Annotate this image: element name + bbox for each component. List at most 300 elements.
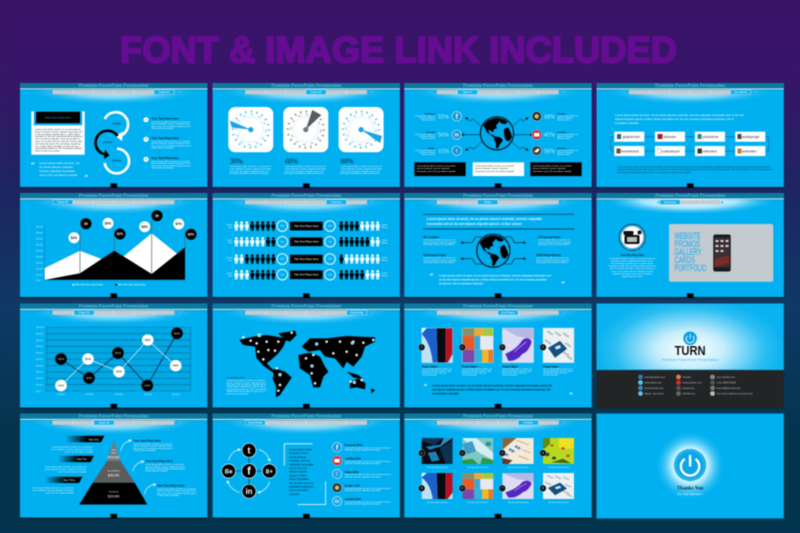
quote: sed ut. Eu mei laboris impedit (39, 173, 77, 177)
map caption: tatis sed ut. Eu mei laboris impedit epicuri (227, 384, 267, 386)
map caption: ut liber dolore formidine est. At cum nonu (227, 386, 266, 389)
right stats: Lorem ipsum dolor sit (557, 115, 578, 118)
bracket text: Vel ut movelium (289, 488, 309, 492)
row labels: Women (382, 276, 388, 278)
people row 1 (234, 221, 380, 231)
logo word: TURN (675, 343, 706, 358)
panel: slide 2 gauges: Graph 04 (311, 90, 322, 94)
arrows cycle: 1st Fact (112, 123, 121, 126)
text card: tate honestatis sed ut. Eu mei laboris impedit ep (35, 142, 81, 145)
axis labels: $50,000 (36, 250, 43, 252)
flag markers: $2% (71, 236, 77, 240)
contacts: Skype: user name (644, 392, 664, 395)
intro text: movelium indicabit (615, 121, 639, 125)
project captions: Project Name (502, 366, 518, 368)
social cross: t (248, 446, 251, 456)
quote: ” (561, 280, 565, 288)
quote: ” (84, 174, 88, 182)
panel: slide 9 line chart: Graph 05 (79, 311, 90, 315)
project captions: Project Name (462, 366, 478, 368)
project captions: Lorem ipsum dolor sit amet, vis (543, 368, 573, 371)
row labels: 75,000 (227, 240, 232, 242)
footer text: Lorem ipsum dolor sit amet, vis an primis discere molestie, inermis vulputate honestatis sed ut. Eu mei laboris impedit epicuri, ut liber dolore formidine est. At cum nonumy postulant prodesset. Vel ut (618, 166, 771, 169)
axis labels: $60,000 (36, 244, 43, 246)
right stats: YouTube (557, 132, 567, 134)
rings and title boxes (277, 221, 335, 280)
social list: Twitter (24%) (345, 471, 359, 474)
panel: slide 11 projects: Our Project (501, 311, 515, 315)
right stats (532, 112, 578, 156)
social list: molestie, inermis vulputate honestatis (345, 449, 380, 452)
row labels: 77,000 (382, 240, 387, 242)
panel: slide 13 pyramid: Graph 06 (99, 421, 110, 425)
panel: slide 3 social globe: Slide 07 (463, 90, 473, 94)
social cross: Be (225, 470, 233, 476)
gauge captions: 80% (341, 158, 354, 166)
contacts: your website.com (716, 376, 735, 379)
flag markers: $3% (188, 232, 194, 236)
project captions: at cum nonumy (502, 374, 518, 377)
panel: slide 7 globe text (404, 193, 592, 298)
bullet list: Your Text Place Here (151, 156, 179, 160)
quote: ut. Eu mei laboris impedit epicuri, ut liber dolore formidine est. At cum nonumy postulant (439, 278, 547, 282)
rings and title boxes: 60% (328, 226, 332, 228)
flag markers: $5 (84, 222, 88, 226)
gauge captions (230, 158, 382, 175)
contacts: www.youtube.com (682, 381, 702, 384)
bracket text (284, 444, 326, 504)
axis labels: $50,000 (36, 359, 43, 361)
gauge captions: Lorem ipsum dolor sit amet, vis an primis di (285, 165, 326, 168)
portfolio captions: The item title text here (467, 501, 489, 504)
text card: dolor sit amet vis an prima (35, 150, 61, 153)
social list: Google + (4%) (345, 485, 360, 488)
row labels: Men (229, 260, 232, 262)
portfolio images (418, 438, 574, 499)
intro text (615, 113, 744, 125)
left notes (424, 236, 457, 264)
bullet list: discere molestie, inermis vulputate hones (151, 142, 191, 145)
series lines white (61, 340, 176, 386)
row labels: Women (382, 260, 388, 262)
contacts: www.linkedin.com (644, 387, 664, 390)
bullet list: 3 (145, 157, 147, 161)
axis labels: $10,000 (36, 274, 43, 276)
panel: slide 14 social media: Social Media (248, 421, 263, 425)
panel: slide 2 gauges (213, 83, 400, 188)
subtitle: Premium PowerPoint Presentation (662, 358, 719, 362)
axis labels: $70,000 (36, 346, 43, 348)
world map (239, 331, 375, 397)
portfolio captions: The item title text here (467, 466, 489, 469)
project captions: Project Name (422, 366, 438, 368)
portfolio captions: The item title text here (507, 466, 529, 469)
project captions: honestatis sed ut. Eu mei (543, 372, 568, 375)
row labels: 1,25,000 (225, 258, 232, 260)
left notes: Lorem ipsum dolor sit amet, vis an primis di (45, 466, 87, 469)
bracket text: Lorem ipsum dolor (289, 448, 312, 452)
bracket text: postulant prodesset. (289, 484, 314, 488)
project captions: honestatis sed ut. Eu mei (422, 372, 447, 375)
pyramid: $75,000 (108, 455, 120, 459)
showcase image: WEBSITE (674, 231, 700, 241)
project images (418, 328, 574, 363)
gauge 80% (339, 107, 384, 152)
quote: Lorem ipsum dolor sit amet, vis an primis discere molestie, inermis vulputate honestatis sed (439, 274, 552, 278)
panel: slide 15 portfolio: Premium PowerPoint Presentation (463, 415, 533, 420)
project captions: Lorem ipsum dolor sit amet, vis (422, 368, 452, 371)
data points: 90% (174, 331, 180, 335)
legend: Title Text Two Goes Here (118, 284, 146, 287)
logo grid: photodune (702, 135, 719, 139)
axis labels: $20,000 (36, 378, 43, 380)
contacts: dribbble.net (682, 392, 695, 395)
panel: slide 6 people rows: Inventory (331, 200, 342, 204)
gauge captions: 30% (230, 158, 243, 166)
footer text: movelium indicabit. Lorem ipsum dolor sit amet, vis an primis discere molestie, inermis vulputate honestatis sed ut. Eu mei laboris impedit epicuri, ut liber dolore formidine est. At cum nonumy postulant (618, 168, 773, 171)
logo grid: videohive (702, 149, 717, 153)
left notes: Lorem ipsum dolor sit amet, vis an primis di (52, 446, 93, 449)
quote: prodesset. Vel ut movelium indicabit (439, 282, 483, 286)
intro text: Lorem ipsum dolor sit amet, vis an primis discere molestie, inermis vulputate honestatis sed ut. Eu mei (615, 113, 744, 117)
panel: slide 1 facts and arrows: Graph 01 (159, 90, 170, 94)
caption: Vel ut movelium indicabit. Lorem ipsum dolor sit (610, 267, 655, 270)
showcase image (669, 224, 773, 282)
flag markers: $2% (117, 232, 123, 236)
people row 4 (234, 270, 380, 280)
nav tabs: Showcase (664, 200, 677, 204)
quote: “ (31, 161, 35, 169)
axis labels: $10,000 (36, 384, 43, 386)
map caption: Lorem ipsum dolor sit amet, vis an primis (227, 379, 266, 382)
right notes: 150 Opening Project (538, 236, 561, 239)
legend: Title Text One Goes Here (75, 284, 104, 287)
right stats: Behance (557, 148, 567, 150)
portfolio captions: The item title text here (427, 466, 449, 469)
social cross: 8+ (266, 468, 273, 475)
headline band: honestatis sed ut. Eu mei laboris impedit epicuri, ut liber dolore (427, 222, 522, 226)
logo grid: graphicriver (622, 135, 641, 139)
panel: slide 13 pyramid: Premium PowerPoint Presentation (79, 415, 149, 420)
social list: Lorem ipsum dolor sit amet, vis an primis discere (345, 473, 392, 476)
left notes: Lorem ipsum dolor sit amet vis an (423, 239, 456, 242)
gauge captions: sed ut. Eu mei laboris impedit epicuri, ut li (230, 170, 270, 173)
left notes: Lorem ipsum dolor sit amet, vis an primis di (33, 486, 74, 490)
thanks text: For Your Attention ! (677, 492, 703, 496)
bracket text: indicabit (289, 492, 299, 496)
rings and title boxes: 85% (280, 259, 285, 261)
arrows cycle: 2nd Fact (103, 141, 112, 144)
rings and title boxes: 55% (280, 274, 285, 276)
axis labels: $30,000 (36, 372, 43, 374)
quote (31, 161, 88, 182)
axis labels: $100,000 (36, 327, 44, 329)
panel: slide 15 portfolio (404, 414, 592, 519)
pyramid: $15,000 (108, 494, 120, 498)
panel: slide 4 marketplaces: Our Clients (734, 90, 748, 94)
portfolio images: 2 (462, 451, 464, 455)
social list: YouTube (45%) (345, 458, 361, 461)
rings and title boxes: 80% (280, 226, 285, 228)
bullet list: tatis sed ut. Eu mei laboris impedit epicuri (151, 125, 191, 128)
bracket text: sed ut. Eu mei (289, 466, 307, 470)
quote: “ (430, 272, 434, 280)
panel: slide 8 showcase (596, 193, 784, 298)
contacts: www.twitter.com (644, 381, 662, 384)
project captions: discere molestie, inermis vulpu (502, 370, 532, 373)
showcase image: GALLERY (674, 247, 702, 257)
axis labels: $80,000 (36, 232, 43, 234)
axis labels: $90,000 (36, 226, 43, 228)
right notes: Your Text Place Here (145, 459, 173, 463)
left notes: sed ut. Eu mei laboris impedit (65, 450, 93, 454)
right stats: Lorem ipsum dolor sit (557, 149, 578, 152)
text card: Lorem ipsum dolor sit amet, vis an prima discere (35, 128, 82, 131)
quote: Lorem ipsum dolor sit amet, vis (39, 161, 80, 165)
project captions (422, 366, 573, 377)
caption: molestie, inermis vulputate honestatis sed ut. (611, 259, 654, 262)
flag markers: $7% (176, 222, 182, 226)
rings and title boxes: 77% (328, 241, 332, 243)
contacts: freemail@hotmail.com (716, 387, 740, 390)
flag markers: $3% (105, 221, 111, 225)
pyramid: Second Month (108, 470, 120, 472)
panel: slide 11 projects (404, 304, 592, 409)
left notes: Lorem ipsum dolor sit amet vis an (423, 257, 456, 260)
project captions: discere molestie, inermis vulpu (422, 370, 452, 373)
contacts: google plus (682, 387, 696, 390)
logo grid: 3docean (663, 135, 676, 139)
rings and title boxes: Title Text Place Here (294, 257, 319, 261)
right notes: tatis sed ut. Eu mei laboris impedit epicuri (145, 468, 185, 470)
left notes: 35+ Countries (423, 236, 439, 239)
bracket text: est. At cum nonumy (289, 481, 314, 485)
area series (44, 227, 186, 280)
row labels (225, 224, 388, 278)
thanks text (677, 486, 703, 496)
left notes (32, 446, 93, 494)
bracket text: dolore formidine (289, 477, 309, 481)
people row 2 (234, 237, 380, 246)
bullet list: tatis sed ut. Eu mei laboris impedit epicuri (151, 164, 191, 167)
right notes: Lorem ipsum dolor sit amet vis an (538, 239, 571, 242)
text card: ut. Eu mei laboris impedit epicuri, ut liber dolore (35, 133, 81, 136)
axis labels (36, 327, 180, 396)
connectors (462, 237, 524, 264)
row labels: Men (229, 227, 232, 229)
panel: slide 11 projects: Premium PowerPoint Presentation (463, 305, 533, 310)
project captions: Lorem ipsum dolor sit amet, vis (462, 368, 492, 371)
logo grid (614, 132, 765, 156)
map caption: SCALABLE MAP (227, 376, 245, 379)
nav tabs (657, 200, 724, 204)
contacts: +141 3856734668 (716, 381, 737, 384)
text card: amet, vis an prima discere molestie, inermis vulpu (35, 140, 83, 143)
social list: Facebook (45%) (345, 444, 362, 447)
right notes: ut liber dolore formidine (133, 449, 156, 452)
map caption: my postulant prodesset. Vel ut movelium in (227, 388, 268, 391)
pyramid (79, 440, 147, 504)
text card: Main Text Goes Here (45, 116, 72, 120)
series lines (61, 333, 177, 386)
bottom boxes: honestatis sed ut. Eu mei laboris impedit (417, 170, 456, 173)
right stats: discere sed ut (557, 119, 571, 122)
left notes: sed ut. Eu mei laboris impedit (58, 470, 86, 474)
gauge captions: 60% (285, 158, 298, 166)
right notes: honestatis sed ut. Eu mei laboris (536, 261, 567, 264)
row labels: Women (382, 227, 388, 229)
icon: power logo (683, 332, 697, 345)
bottom boxes: Lorem ipsum dolor sit amet, vis an primis (417, 164, 456, 168)
caption: vulputate honestatis sed ut. Eu mei laboris (612, 272, 652, 275)
bullet list: Lorem ipsum dolor sit amet, vis an primis (151, 120, 190, 123)
panel: slide 5 area chart: Graph 02 (57, 200, 69, 204)
project captions: at cum nonumy (462, 374, 478, 377)
right stats: 56% (544, 149, 555, 155)
bullet list: Your Text Place Here (151, 136, 179, 140)
social list: f (336, 445, 339, 452)
logo connectors (611, 137, 768, 151)
data points: 60% (115, 351, 121, 355)
map caption: discere molestie, inermis vulputate hones (227, 381, 266, 384)
social cross (222, 443, 276, 498)
icon: video camera (619, 224, 645, 250)
social list: molestie, inermis vulputate honestatis (345, 503, 380, 506)
portfolio images: 6 (462, 486, 464, 490)
quote (430, 272, 565, 288)
showcase image: PROMOS (674, 239, 700, 249)
axis labels: $60,000 (36, 353, 43, 355)
bullet list: ut liber dolore formidine (151, 127, 174, 130)
cycle arrows (228, 450, 270, 492)
caption: Your Text Place Here (621, 254, 645, 257)
project captions: Lorem ipsum dolor sit amet, vis (502, 368, 532, 371)
social list: molestie, inermis vulputate honestatis (345, 489, 380, 492)
project images: 1 (421, 345, 423, 349)
bullet list (143, 117, 191, 170)
right notes (133, 438, 197, 497)
contacts: Youtube (682, 376, 692, 379)
bracket text: epicuri, ut liber (289, 473, 307, 477)
left stats: f (456, 114, 459, 121)
panel: slide 15 portfolio: Portfolio (524, 421, 534, 425)
left notes: honestatis sed ut. Eu mei laboris (423, 243, 454, 246)
left stats (415, 112, 461, 156)
logo grid: activeden (742, 149, 757, 153)
left stats: discere sed ut (422, 137, 435, 140)
caption: Lorem ipsum dolor sit amet, vis an primis discere (609, 257, 656, 260)
caption: formidine est. At cum nonumy postulant prodesset (609, 265, 656, 268)
caption (609, 254, 656, 278)
text card: my postulant prodesset. Vel ut movelium indicabit (35, 147, 82, 150)
axis labels (36, 226, 43, 282)
left stats: Lorem ipsum dolor sit (415, 149, 435, 152)
axis labels: $80,000 (36, 340, 43, 342)
globe icon (480, 117, 514, 150)
arrows cycle (96, 112, 129, 173)
right notes: ut liber dolore formidine (145, 470, 168, 473)
portfolio captions (427, 466, 570, 504)
portfolio captions: The item title text here (548, 466, 570, 469)
right stats: Google+ (557, 114, 567, 116)
left notes: scere molestie, inermis vulputate honestatis (44, 468, 86, 471)
intro text: laboris impedit epicuri, ut liber dolore formidine est. At cum nonumy postulant prodesset. Vel ut (615, 117, 734, 121)
social list: molestie, inermis vulputate honestatis (345, 462, 380, 465)
axis labels: $70,000 (36, 238, 43, 240)
connectors (462, 118, 531, 150)
data points: 80% (145, 338, 151, 342)
portfolio captions: The item title text here (427, 501, 449, 504)
gauge captions: ber dolore formidine est. At cum nonumy (341, 172, 380, 175)
axis labels: $90,000 (36, 334, 43, 336)
curved arrows (121, 440, 155, 494)
right stats: discere molestie (557, 135, 574, 138)
left stats: 15% (438, 149, 449, 155)
project captions: honestatis sed ut. Eu mei (462, 372, 487, 375)
bullet list: Lorem ipsum dolor sit amet, vis an primis (151, 140, 190, 143)
quote: “ (424, 382, 428, 390)
left stats: 56% (438, 133, 449, 139)
left notes: discere molestie, inermis vulputate (423, 241, 457, 244)
arrows cycle: 3rd Fact (112, 160, 121, 163)
right notes: tatis sed ut. Eu mei laboris impedit epicuri (133, 447, 173, 450)
left notes: discere molestie, inermis vulputate (423, 259, 457, 262)
social list: Lorem ipsum dolor sit amet, vis an primis discere (345, 487, 392, 490)
row labels: Women (382, 243, 388, 245)
bottom boxes: Lorem ipsum dolor sit amet, vis an primis (475, 164, 514, 168)
contacts: Your street address text goes here (716, 392, 754, 395)
left stats: t (456, 148, 458, 154)
panel: slide 9 line chart: Premium PowerPoint Presentation (79, 305, 149, 310)
gauge captions: ber dolore formidine est. At cum nonumy (230, 172, 269, 175)
gauge 30% (228, 107, 273, 152)
left notes: scere molestie, inermis vulputate honestatis (32, 489, 74, 492)
caption: Eu mei laboris impedit epicuri, ut liber dolore (611, 262, 654, 265)
caption: impedit epicuri ut liber (622, 275, 643, 278)
right stats: 45% (544, 133, 555, 139)
panel: slide 4 marketplaces: Premium PowerPoint Presentation (655, 84, 725, 89)
panel: slide 10 world map (213, 304, 400, 409)
row labels: 80,000 (227, 224, 232, 226)
project captions: discere molestie, inermis vulpu (462, 370, 492, 373)
left stats: discere molestie (420, 151, 436, 154)
axis labels: 1/31/2002 (171, 394, 180, 396)
contacts: www.facebook.com (644, 376, 665, 379)
bottom boxes: honestatis sed ut. Eu mei laboris impedit (533, 170, 572, 173)
footer text (618, 166, 773, 174)
right stats: 18% (544, 114, 555, 120)
panel: slide 10 world map: Global Map (350, 311, 364, 315)
row labels: Men (229, 276, 232, 278)
panel: slide 7 globe text: Globe (484, 200, 492, 204)
right notes: tatis sed ut. Eu mei laboris impedit epicuri (157, 492, 197, 495)
axis labels: 1/31/2002 (115, 394, 123, 396)
bottom boxes: Lorem ipsum dolor sit amet, vis an primis (533, 164, 572, 168)
panel: slide 7 globe text: Premium PowerPoint Presentation (463, 194, 533, 199)
portfolio captions: The item title text here (548, 501, 570, 504)
portfolio images: 5 (421, 486, 423, 490)
bullet list: discere molestie, inermis vulputate hones (151, 123, 191, 126)
row labels: 60,000 (382, 224, 387, 226)
flag markers: $5 (155, 214, 159, 218)
social list: LinkedIn (45%) (345, 498, 361, 501)
bracket text: vulputate honestatis (289, 462, 314, 466)
right notes: Lorem ipsum dolor sit amet, vis an primis (157, 488, 196, 490)
data points: 10% (144, 384, 151, 388)
left stats: Lorem ipsum dolor sit (415, 115, 435, 118)
right notes: discere molestie, inermis vulputate hones (145, 465, 185, 468)
arrowheads (460, 241, 526, 260)
